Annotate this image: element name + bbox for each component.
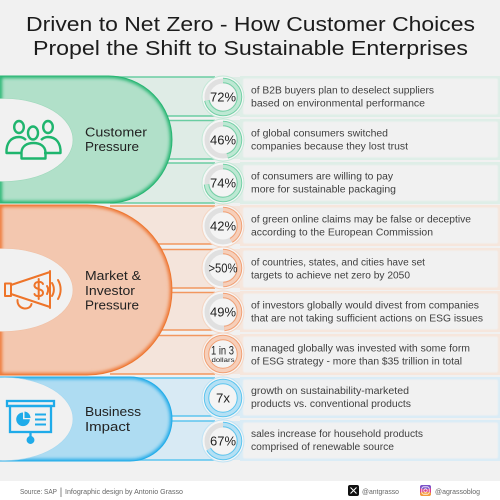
text: X handle: @antgrasso: [362, 487, 399, 496]
text: green claims: according to the European Commission: [251, 228, 433, 238]
icon: Instagram: [420, 485, 431, 496]
text: sustainable packaging: more for sustainable packaging: [251, 184, 396, 196]
gauge: 42%: [202, 205, 244, 247]
text: investors divest: that are not taking sufficient actions on ESG issues: [251, 314, 483, 324]
panel: business impact rows: [110, 377, 500, 461]
gauge: over 50%: [202, 247, 244, 289]
icon: people: [6, 121, 61, 158]
gauge: 74%: [202, 162, 244, 204]
text: sustainable packaging: [251, 172, 396, 196]
label: market and investor pressure: [85, 268, 141, 312]
gauge: 1 in 3 dollars: 1 in 3: [211, 344, 234, 358]
gauge: 42%: 42%: [210, 218, 236, 234]
label: business impact: Impact: [85, 419, 130, 434]
gauge: 1 in 3 dollars: dollars: [212, 357, 235, 364]
gauge: 74%: 74%: [210, 176, 236, 190]
title: Propel the Shift to Sustainable Enterprises: [33, 37, 468, 60]
text: global consumers: companies because they lost trust: [251, 142, 408, 152]
text: B2B buyers: of B2B buyers plan to deselect suppliers: [251, 86, 434, 96]
icon: X: [348, 485, 359, 496]
text: sustainability-marketed growth: products vs. conventional products: [251, 399, 411, 410]
gauge: 72%: [202, 76, 244, 118]
label: market and investor pressure: Investor: [85, 283, 136, 298]
label: business impact: [85, 404, 141, 434]
label: customer pressure: Customer: [85, 124, 148, 140]
title: Driven to Net Zero - How Customer Choices: [26, 13, 475, 36]
gauge: 46%: 46%: [210, 132, 236, 148]
text: household products: comprised of renewable source: [251, 442, 394, 453]
label: market and investor pressure: Pressure: [85, 298, 139, 312]
panel: business impact: [0, 377, 172, 461]
label: customer pressure: [85, 124, 148, 154]
panel: market and investor pressure: [0, 205, 172, 375]
text: sustainable packaging: of consumers are willing to pay: [251, 172, 393, 182]
text: ESG strategy: managed globally was invested with some form: [251, 344, 470, 354]
footer: source and credit: [20, 487, 183, 497]
text: global consumers: [251, 128, 408, 152]
gauge: 46%: [202, 119, 244, 161]
text: Instagram handle: @agrassoblog: [435, 487, 480, 496]
panel: customer pressure: [0, 76, 172, 203]
gauge: 67%: [202, 420, 244, 462]
gauge: 72%: 72%: [210, 90, 236, 104]
icon: presentation board: [7, 401, 54, 443]
text: sustainability-marketed growth: [251, 386, 411, 410]
text: household products: sales increase for household products: [251, 429, 423, 440]
label: customer pressure: Pressure: [85, 139, 139, 154]
text: household products: [251, 429, 423, 453]
gauge: 49%: [202, 291, 244, 333]
text: B2B buyers: based on environmental performance: [251, 98, 425, 110]
footer: source and credit: Infographic design by Antonio Grasso: [65, 487, 183, 496]
icon: megaphone: [5, 271, 61, 309]
gauge: 7x: 7x: [216, 390, 230, 406]
panel: customer pressure rows: [110, 76, 500, 204]
label: market and investor pressure: Market &: [85, 268, 141, 283]
text: investors divest: of investors globally would divest from companies: [251, 300, 479, 312]
text: sustainability-marketed growth: growth on sustainability-marketed: [251, 386, 409, 397]
panel: market and investor rows: [110, 205, 500, 375]
text: ESG strategy: [251, 344, 470, 368]
text: net zero targets: of countries, states, and cities have set: [251, 258, 425, 268]
text: global consumers: of global consumers switched: [251, 128, 388, 140]
text: green claims: [251, 214, 471, 238]
text: net zero targets: [251, 258, 425, 282]
text: B2B buyers: [251, 86, 434, 110]
gauge: 7x: [202, 377, 244, 419]
text: ESG strategy: of ESG strategy - more than $35 trillion in total: [251, 356, 462, 368]
text: net zero targets: targets to achieve net zero by 2050: [251, 270, 410, 282]
title: [26, 13, 475, 60]
text: investors divest: [251, 300, 483, 324]
gauge: 49%: 49%: [210, 304, 236, 320]
text: green claims: of green online claims may be false or deceptive: [251, 214, 471, 226]
label: business impact: Business: [85, 404, 141, 419]
gauge: 1 in 3 dollars: [202, 333, 244, 375]
gauge: over 50%: >50%: [208, 260, 238, 276]
gauge: 67%: 67%: [210, 434, 236, 448]
footer: source and credit: Source: SAP: [20, 487, 57, 496]
